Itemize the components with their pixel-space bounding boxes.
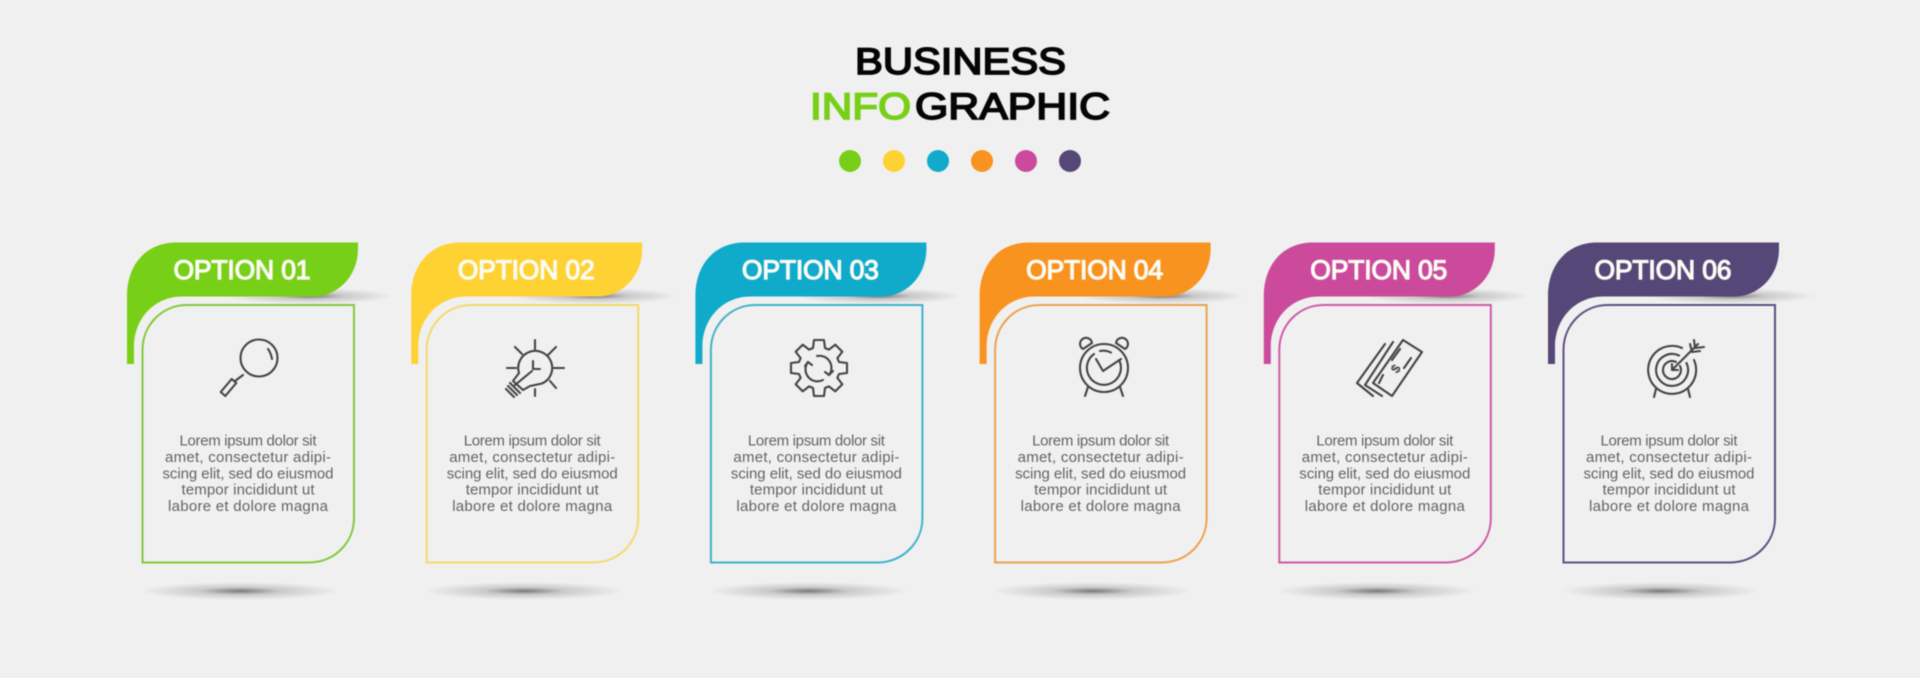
body text: labore et dolore magna [1589, 498, 1750, 515]
heading: option 01: OPTION 01 [174, 255, 310, 285]
panel: option 01 [127, 242, 394, 600]
body text [731, 432, 902, 515]
body text: scing elit, sed do eiusmod [1584, 465, 1754, 482]
tab: option 01 [127, 242, 358, 364]
body text: labore et dolore magna [452, 498, 613, 515]
body text: tempor incididunt ut [182, 482, 315, 499]
panel: option 02 [411, 242, 678, 600]
body text: scing elit, sed do eiusmod [731, 465, 902, 482]
card outline [1279, 305, 1491, 562]
body text: amet, consectetur adipi- [733, 449, 899, 466]
card outline [427, 305, 638, 562]
panel: option 04 [980, 242, 1247, 600]
heading: option 02: OPTION 02 [458, 255, 595, 285]
body text: amet, consectetur adipi- [1018, 449, 1184, 466]
body text: tempor incididunt ut [1034, 482, 1168, 499]
body text [1584, 432, 1754, 515]
panel: option 05 [1264, 242, 1531, 600]
colour dots row [839, 150, 1081, 172]
icon: magnifier [221, 340, 278, 396]
body text [1015, 432, 1186, 515]
body text: Lorem ipsum dolor sit [1316, 432, 1454, 450]
icon: banknotes: $ [1387, 361, 1404, 376]
tab: option 04 [980, 242, 1211, 364]
body text [1299, 432, 1470, 515]
card outline [142, 305, 354, 562]
title: GRAPHIC [915, 86, 1110, 127]
body text [447, 432, 618, 515]
panel: option 06 [1548, 242, 1815, 600]
icon: gear [791, 340, 847, 396]
tab: option 03 [695, 242, 926, 364]
card outline [995, 305, 1207, 562]
card outline [1564, 305, 1775, 562]
body text: amet, consectetur adipi- [165, 449, 331, 466]
card outline [711, 305, 922, 562]
body text: Lorem ipsum dolor sit [464, 432, 602, 450]
body text [162, 432, 334, 515]
body text: tempor incididunt ut [750, 482, 884, 499]
panel: option 03 [695, 242, 962, 600]
body text: Lorem ipsum dolor sit [748, 432, 886, 450]
body text: labore et dolore magna [168, 498, 329, 515]
body text: amet, consectetur adipi- [449, 449, 615, 466]
icon: alarm clock [1080, 338, 1128, 396]
body text: tempor incididunt ut [466, 482, 600, 499]
title: INFO [810, 86, 911, 127]
body text: labore et dolore magna [736, 498, 897, 515]
body text: scing elit, sed do eiusmod [1299, 465, 1470, 482]
icon: target with arrow [1648, 340, 1704, 397]
tab: option 02 [411, 242, 642, 364]
heading: option 03: OPTION 03 [742, 255, 879, 285]
heading: option 04: OPTION 04 [1026, 255, 1163, 285]
body text: tempor incididunt ut [1602, 482, 1736, 499]
body text: scing elit, sed do eiusmod [447, 465, 618, 482]
title: BUSINESS [855, 41, 1066, 82]
body text: scing elit, sed do eiusmod [162, 465, 334, 482]
body text: tempor incididunt ut [1318, 482, 1452, 499]
body text: labore et dolore magna [1021, 498, 1181, 515]
icon: banknotes [1357, 340, 1422, 396]
body text: labore et dolore magna [1305, 498, 1465, 515]
icon: light bulb [506, 340, 564, 397]
body text: scing elit, sed do eiusmod [1015, 465, 1186, 482]
tab: option 05 [1264, 242, 1495, 364]
body text: amet, consectetur adipi- [1302, 449, 1468, 466]
title [810, 41, 1110, 127]
heading: option 05: OPTION 05 [1310, 255, 1447, 285]
body text: amet, consectetur adipi- [1586, 449, 1752, 466]
body text: Lorem ipsum dolor sit [1600, 432, 1738, 450]
body text: Lorem ipsum dolor sit [1032, 432, 1170, 450]
body text: Lorem ipsum dolor sit [180, 432, 317, 450]
heading: option 06: OPTION 06 [1594, 255, 1732, 285]
tab: option 06 [1548, 242, 1779, 364]
